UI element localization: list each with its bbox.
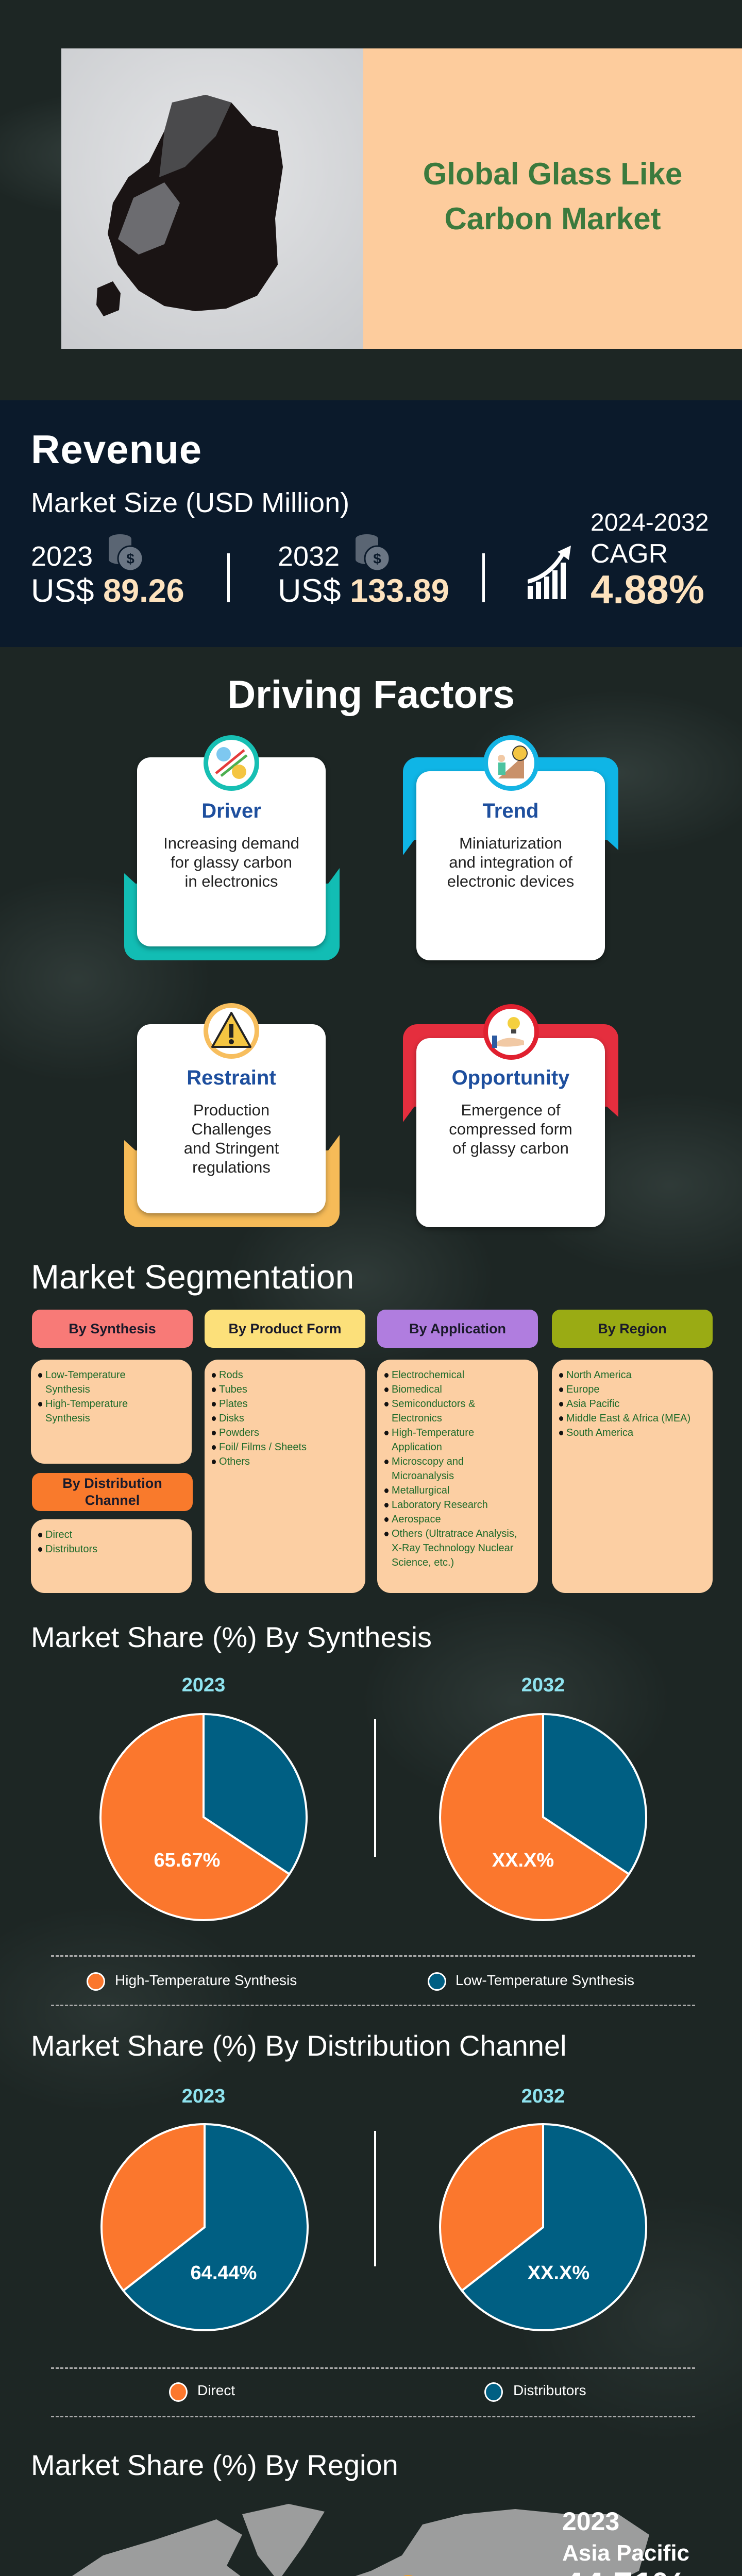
segmentation: by application: Application	[392, 1442, 442, 1453]
icon: driver	[204, 735, 259, 791]
label 2032: 2032	[521, 2086, 565, 2107]
pie chart: synthesis 2032	[439, 1713, 647, 1921]
title: Carbon Market	[444, 201, 661, 236]
segmentation: by application: Laboratory Research	[392, 1499, 488, 1511]
cagr: 2024-2032	[591, 509, 709, 536]
segmentation: by synthesis: High-Temperature	[45, 1398, 128, 1410]
panel: trend: and integration of	[449, 853, 572, 871]
label 2023: 2023	[182, 2086, 225, 2107]
panel: restraint: regulations	[192, 1158, 271, 1176]
pie chart: distribution 2023: 64.44%	[191, 2262, 257, 2284]
panel: driver: Increasing demand	[163, 834, 299, 852]
segmentation: by application: Aerospace	[392, 1514, 441, 1525]
panel: trend: electronic devices	[447, 872, 574, 890]
icon: growth chart	[528, 546, 571, 599]
segmentation: by product form: Tubes	[219, 1384, 247, 1395]
segmentation: by application: By Application	[409, 1321, 506, 1336]
panel: opportunity: of glassy carbon	[452, 1139, 569, 1157]
driving factors heading: Driving Factors	[227, 673, 515, 717]
segmentation: by region: Asia Pacific	[566, 1398, 619, 1410]
segmentation: by distribution channel	[31, 1473, 193, 1593]
hero image	[61, 48, 363, 349]
segmentation: by application: Semiconductors &	[392, 1398, 475, 1410]
pie chart: distribution 2032: XX.X%	[528, 2262, 589, 2284]
icon: warning	[204, 1003, 259, 1059]
cagr: CAGR	[591, 539, 668, 569]
segmentation: by distribution channel: Channel	[85, 1493, 140, 1508]
segmentation: by application: Electrochemical	[392, 1369, 464, 1381]
segmentation: by application: Science, etc.)	[392, 1557, 454, 1568]
panel: driver	[124, 735, 340, 960]
callout: asia pacific: 2023	[562, 2507, 619, 2536]
revenue band	[0, 400, 742, 647]
panel: driver: in electronics	[185, 872, 278, 890]
segmentation: by application: Biomedical	[392, 1384, 442, 1395]
title	[423, 157, 682, 236]
panel: trend: Miniaturization	[459, 834, 562, 852]
value 2023: 2023	[31, 541, 93, 572]
segmentation: by region: By Region	[598, 1321, 667, 1336]
legend: synthesis	[87, 1972, 634, 1991]
icon: coins	[109, 534, 142, 570]
segmentation: by application: High-Temperature	[392, 1427, 474, 1438]
value 2032	[278, 534, 449, 609]
pie chart: distribution 2032	[439, 2123, 647, 2331]
segmentation: by synthesis	[31, 1310, 193, 1464]
segmentation: by product form	[205, 1310, 365, 1593]
segmentation: by distribution channel: Direct	[45, 1529, 72, 1540]
legend: distribution: Direct	[197, 2382, 235, 2398]
segmentation: by distribution channel: Distributors	[45, 1544, 97, 1555]
panel: restraint: Challenges	[191, 1120, 272, 1138]
segmentation: by application	[377, 1310, 538, 1593]
segmentation: by product form: Rods	[219, 1369, 243, 1381]
panel: driver: Driver	[201, 800, 261, 822]
value 2032: 2032	[278, 541, 340, 572]
icon: coins: $	[373, 551, 381, 567]
panel: opportunity: Opportunity	[452, 1066, 569, 1089]
segmentation: by synthesis: Low-Temperature	[45, 1369, 126, 1381]
segmentation: by product form: Foil/ Films / Sheets	[219, 1442, 307, 1453]
value 2032: US$ 133.89	[278, 573, 449, 609]
segmentation: by region: North America	[566, 1369, 632, 1381]
heading: share by distribution: Market Share (%) By Distribution Channel	[31, 2029, 567, 2062]
heading: share by region: Market Share (%) By Region	[31, 2449, 398, 2481]
panel: restraint: and Stringent	[184, 1139, 279, 1157]
legend: distribution	[169, 2382, 586, 2402]
panel: trend	[403, 735, 618, 961]
revenue heading: Revenue	[31, 427, 202, 472]
panel: opportunity: Emergence of	[461, 1101, 561, 1119]
segmentation: by synthesis: Synthesis	[45, 1384, 90, 1395]
label 2032: 2032	[521, 1674, 565, 1696]
title: Global Glass Like	[423, 157, 682, 191]
panel: trend: Trend	[483, 800, 538, 822]
segmentation: by product form: Others	[219, 1456, 250, 1467]
label 2023: 2023	[182, 1674, 225, 1696]
panel: restraint: Production	[193, 1101, 269, 1119]
segmentation: by application: Others (Ultratrace Analysis,	[392, 1528, 517, 1539]
icon: coins	[356, 534, 389, 570]
pie chart: distribution 2023	[100, 2123, 309, 2331]
segmentation: by application: Microanalysis	[392, 1470, 454, 1482]
pie chart: synthesis 2032: XX.X%	[492, 1850, 554, 1871]
cagr: 4.88%	[591, 567, 704, 612]
value 2023	[31, 534, 184, 609]
segmentation: by region: South America	[566, 1427, 633, 1438]
legend: synthesis: High-Temperature Synthesis	[115, 1972, 297, 1988]
segmentation: by application: Microscopy and	[392, 1456, 464, 1467]
segmentation: by application: Electronics	[392, 1413, 442, 1424]
heading: market segmentation: Market Segmentation	[31, 1258, 354, 1296]
value 2023: US$ 89.26	[31, 573, 184, 609]
icon: coins: $	[126, 551, 134, 567]
icon: opportunity	[483, 1004, 539, 1060]
segmentation: by synthesis: Synthesis	[45, 1413, 90, 1424]
callout: asia pacific	[562, 2507, 689, 2576]
panel: restraint	[124, 1003, 340, 1227]
pie chart: synthesis 2023	[99, 1713, 308, 1921]
panel: restraint: Restraint	[187, 1066, 276, 1089]
panel: opportunity	[403, 1004, 618, 1229]
world map	[72, 2504, 649, 2576]
segmentation: by product form: By Product Form	[228, 1321, 342, 1336]
panel: opportunity: compressed form	[449, 1120, 572, 1138]
callout: asia pacific: Asia Pacific	[562, 2540, 689, 2566]
segmentation: by product form: Powders	[219, 1427, 259, 1438]
legend: synthesis: Low-Temperature Synthesis	[456, 1972, 634, 1988]
pie chart: synthesis 2023: 65.67%	[154, 1850, 220, 1871]
segmentation: by region: Middle East & Africa (MEA)	[566, 1413, 690, 1424]
icon: trend	[483, 735, 539, 791]
segmentation: by region: Europe	[566, 1384, 600, 1395]
segmentation: by application: X-Ray Technology Nuclear	[392, 1543, 513, 1554]
text: Distributors	[513, 2382, 586, 2398]
segmentation: by distribution channel: By Distribution	[62, 1476, 162, 1491]
cagr	[528, 509, 709, 612]
segmentation: by synthesis: By Synthesis	[69, 1321, 156, 1336]
title panel	[363, 48, 742, 349]
market size label: Market Size (USD Million)	[31, 487, 349, 518]
heading: share by synthesis: Market Share (%) By Synthesis	[31, 1621, 432, 1653]
segmentation: by product form: Plates	[219, 1398, 248, 1410]
segmentation: by product form: Disks	[219, 1413, 244, 1424]
segmentation: by application: Metallurgical	[392, 1485, 449, 1496]
panel: driver: for glassy carbon	[171, 853, 292, 871]
segmentation: by region	[552, 1310, 713, 1593]
